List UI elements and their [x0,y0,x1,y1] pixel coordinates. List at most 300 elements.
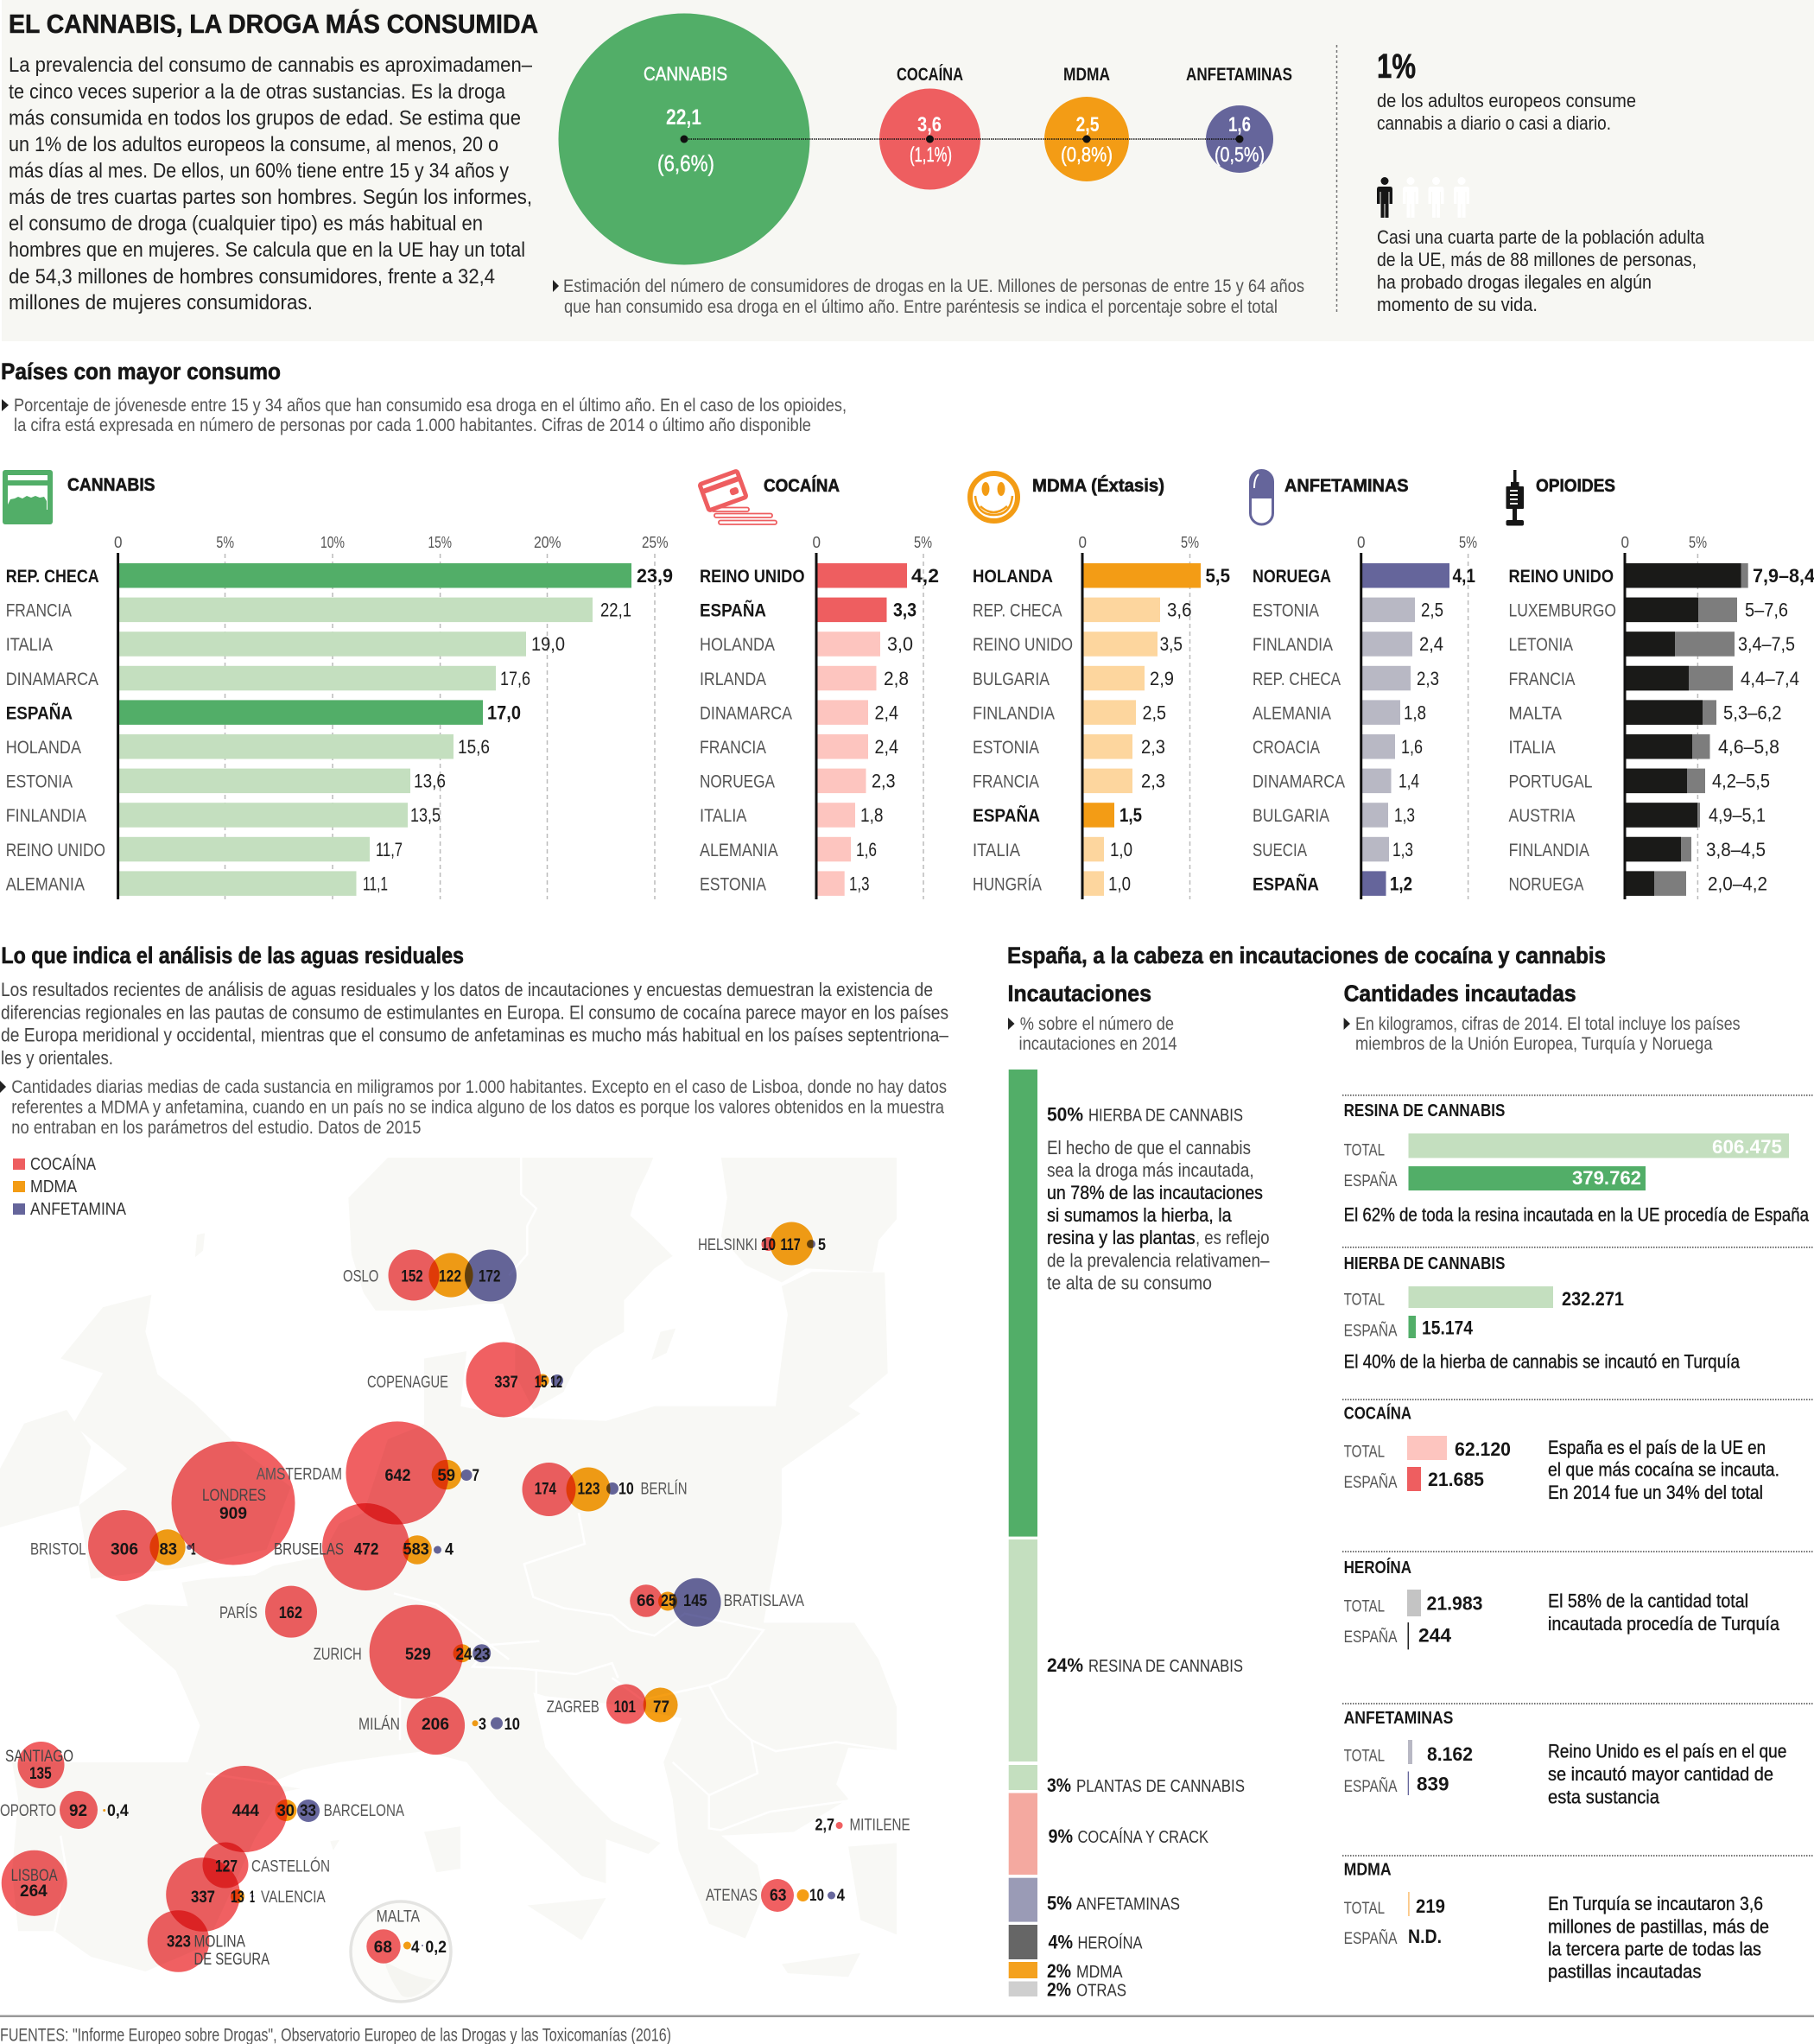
city: Amsterdam: 642 [385,1467,411,1485]
row: ESPAÑA [1253,871,1412,896]
row: LUXEMBURGO: LUXEMBURGO [1508,601,1616,621]
row: DINAMARCA: 1,4 [1399,771,1419,792]
label: 2% otras: 2% [1047,1978,1071,2000]
row: ALEMANIA: 1,8 [1404,701,1426,723]
row: ALEMANIA [700,837,877,861]
row: ESTONIA [1253,598,1443,622]
city: París: 162 [279,1604,302,1622]
city: París: PARÍS [219,1604,257,1622]
label: 3% plantas: PLANTAS DE CANNABIS [1076,1777,1245,1796]
city: Bratislava: 25 [661,1592,676,1610]
block: anfetaminas: esta sustancia [1548,1786,1660,1807]
note: map [0,1077,947,1138]
row: REP. CHECA: 2,3 [1417,668,1439,689]
city: Milán: 206 [422,1716,449,1734]
text block: hierba: un 78% de las incautaciones [1047,1182,1263,1203]
block: anfetaminas: 8.162 [1427,1743,1473,1765]
row: ITALIA: ITALIA [6,635,53,655]
city: Molina de Segura [148,1910,270,1972]
city: Oporto: 0,4 [107,1802,129,1820]
row: FRANCIA: 22,1 [600,600,631,621]
city: Lisboa: LISBOA [11,1867,58,1885]
city: Milán: 10 [504,1716,520,1734]
city: Atenas: 63 [770,1887,786,1905]
note: miembros de la Unión Europea, Turquía y Noruega [1355,1034,1713,1054]
row: HOLANDA [973,563,1230,587]
label: 24% resina [1047,1654,1243,1676]
row: CROACIA: CROACIA [1253,738,1320,758]
city: Bristol: 83 [159,1540,177,1558]
block: anfetaminas: 839 [1417,1773,1449,1795]
row: MALTA: 5,3–6,2 [1723,701,1781,723]
label: 50% hierba: 50% [1047,1104,1083,1126]
row: DINAMARCA: DINAMARCA [1253,772,1345,792]
block: cocaína: ESPAÑA [1344,1473,1398,1492]
icon: pill [1251,470,1273,524]
city: Berlín: 174 [535,1481,556,1499]
label: 4% heroína [1049,1932,1143,1953]
city: Mitilene: 2,7 [815,1816,834,1834]
label: 9% cocaína [1049,1825,1209,1847]
block: mdma: ESPAÑA [1344,1929,1398,1948]
row: REP. CHECA [6,563,673,587]
row: REP. CHECA: REP. CHECA [1253,670,1341,689]
block: cocaína: 62.120 [1455,1438,1511,1460]
city: Castellón: 127 [215,1857,238,1876]
row: FRANCIA: 2,3 [1141,771,1165,792]
row: REP. CHECA [1253,666,1439,690]
chart: MDMA [970,473,1230,899]
stacked bar [1009,1070,1037,1996]
row: REINO UNIDO [700,563,939,587]
row: FINLANDIA [1253,632,1443,657]
city: Oslo: 172 [479,1268,501,1286]
row: ESPAÑA: 1,2 [1390,873,1412,894]
chart: drug users bubbles: ANFETAMINAS [1186,65,1292,85]
city: Milán [358,1697,520,1755]
city: Bristol: BRISTOL [30,1540,86,1558]
row: REINO UNIDO: REINO UNIDO [1508,567,1614,587]
note: En kilogramos, cifras de 2014. El total incluye los países [1355,1014,1741,1034]
chart: cocaína [698,470,939,899]
row: FRANCIA: FRANCIA [700,738,766,758]
label: 24% resina: 24% [1047,1654,1083,1676]
intro text block: La prevalencia del consumo de cannabis es aproximadamen– [9,54,533,77]
block: cocaína: COCAÍNA [1344,1403,1411,1424]
text block: hierba [1047,1137,1270,1294]
stat: quarter of population [1377,226,1705,315]
text block: hierba: resina y las plantas [1047,1227,1196,1248]
block: resina de cannabis: RESINA DE CANNABIS [1344,1101,1505,1120]
chart note [553,276,1304,317]
chart: anfetaminas [1251,470,1477,899]
legend: ANFETAMINA [30,1200,127,1219]
chart: opioides [1506,470,1814,899]
city: Londres: LONDRES [202,1487,266,1505]
city: Berlín: 123 [577,1481,599,1499]
row: ESTONIA: ESTONIA [6,772,73,792]
row: ALEMANIA: ALEMANIA [1253,703,1331,723]
city: Amsterdam: 7 [472,1467,479,1485]
block: cocaína: España es el país de la UE en [1548,1437,1766,1458]
label: 4% heroína: HEROÍNA [1078,1933,1143,1953]
block: cocaína: 21.685 [1428,1469,1484,1490]
row: FRANCIA: FRANCIA [6,601,72,621]
row: FRANCIA: 4,4–7,4 [1741,668,1799,689]
city: Zagreb: ZAGREB [547,1698,599,1717]
row: IRLANDA [700,666,909,690]
heading: países con mayor consumo: Países con mayor consumo [1,359,281,384]
chart: drug users bubbles: MDMA [1063,65,1110,85]
city: Mitilene [815,1816,910,1834]
chart: drug users bubbles: 22,1 [666,105,701,130]
city: Amsterdam: 59 [437,1467,455,1485]
city: Oporto: 92 [69,1802,87,1820]
row: REP. CHECA: 3,6 [1167,600,1192,621]
row: ESTONIA: 2,5 [1421,600,1443,621]
text block: hierba: , es reflejo [1196,1227,1270,1248]
chart: drug users bubbles: 3,6 [917,113,942,136]
note: países [2,396,847,435]
row: IRLANDA: 2,8 [884,668,909,689]
subheading: Cantidades incautadas [1344,981,1576,1006]
block: resina de cannabis: ESPAÑA [1344,1171,1398,1190]
chart: opioides: 0 [1621,534,1629,551]
row: ITALIA: 1,8 [860,804,883,826]
block: mdma: pastillas incautadas [1548,1961,1702,1983]
row: NORUEGA: NORUEGA [700,772,775,792]
row: BULGARIA: BULGARIA [1253,806,1329,826]
row: FINLANDIA: FINLANDIA [1508,841,1589,860]
intro text block: de 54,3 millones de hombres consumidores, frente a 32,4 [9,265,495,289]
legend [13,1154,127,1219]
label: 4% heroína: 4% [1049,1932,1073,1953]
city: Valencia: VALENCIA [261,1888,326,1907]
panel: top summary [2,0,1814,341]
chart: drug users bubbles: (0,8%) [1061,143,1113,167]
block: heroína [1344,1558,1780,1649]
icon: cannabis [3,470,53,524]
text block: hierba: si sumamos la hierba, la [1047,1204,1232,1226]
row: BULGARIA: BULGARIA [973,670,1050,689]
chart: opioides: 5% [1689,534,1707,551]
city: Zurich: 23 [474,1646,491,1664]
row: FINLANDIA [1508,837,1766,861]
city: Santiago: SANTIAGO [5,1748,73,1766]
city: Atenas: 10 [809,1887,824,1905]
row: HOLANDA: HOLANDA [6,738,81,758]
icon: syringe [1506,470,1524,525]
row: ALEMANIA: 11,1 [363,873,388,894]
row: PORTUGAL: PORTUGAL [1508,772,1593,792]
chart note: Estimación del número de consumidores de drogas en la UE. Millones de personas de entre 15 y 64 años [563,276,1304,296]
row: ESPAÑA [700,598,917,622]
row: DINAMARCA [6,666,530,690]
text block: hierba: de la prevalencia relativamen– [1047,1249,1270,1272]
row: ESPAÑA [973,803,1142,828]
row: FRANCIA [700,734,898,759]
label: 50% hierba: HIERBA DE CANNABIS [1088,1107,1243,1126]
row: REP. CHECA [973,598,1192,622]
city: Barcelona: 30 [277,1802,295,1820]
chart: drug users bubbles: 1,6 [1228,113,1251,136]
block: mdma: MDMA [1344,1861,1392,1880]
row: ALEMANIA [1253,700,1426,725]
row: SUECIA [1253,837,1413,861]
block: mdma: N.D. [1408,1926,1442,1947]
block: hierba de cannabis: ESPAÑA [1344,1322,1398,1341]
city: Molina de Segura: MOLINA [193,1933,245,1951]
chart: cannabis: 15% [428,534,452,551]
row: DINAMARCA: DINAMARCA [6,670,98,689]
row: ESTONIA: 1,3 [849,873,869,894]
chart: MDMA: 5% [1181,534,1199,551]
row: LETONIA: LETONIA [1508,635,1573,655]
city: Oslo: OSLO [343,1268,378,1286]
city: Zagreb: 101 [614,1698,636,1717]
city: Bratislava: 66 [637,1592,655,1610]
intro text block: el consumo de droga (cualquier tipo) es más habitual en [9,213,483,235]
city: Malta: 68 [374,1939,392,1957]
block: cocaína: el que más cocaína se incauta. [1548,1458,1779,1481]
city: Barcelona [201,1766,404,1852]
row: REINO UNIDO: 11,7 [376,839,403,860]
text block: aguas residuales: Los resultados recientes de análisis de aguas residuales y los datos de incautaciones y encuestas demuestran la existencia de [1,979,933,1000]
text block: aguas residuales: de Europa meridional y occidental, mientras que el consumo de anfetaminas es mucho más habitual en los países septentriona– [1,1025,949,1046]
city: Bratislava: 145 [683,1592,707,1610]
city: Molina de Segura: DE SEGURA [193,1951,270,1969]
row: REINO UNIDO: REINO UNIDO [973,635,1073,655]
row: ALEMANIA: 1,6 [856,839,877,860]
city: Bruselas: 583 [403,1540,429,1558]
row: NORUEGA: NORUEGA [1508,874,1584,894]
city: Bristol [30,1510,196,1581]
row: REINO UNIDO: REINO UNIDO [6,841,105,860]
chart: MDMA: 0 [1078,534,1087,551]
row: NORUEGA [1508,871,1767,896]
intro text block: más de tres cuartas partes son hombres. Según los informes, [9,186,532,209]
row: ITALIA: ITALIA [700,806,746,826]
city: Mitilene: MITILENE [850,1816,910,1834]
row: HUNGRÍA [973,871,1131,896]
row: FINLANDIA [973,700,1166,725]
icon: people one in four [1377,177,1469,218]
city: Valencia: 13 [231,1888,244,1907]
row: LUXEMBURGO: 5–7,6 [1745,600,1788,621]
intro text block: te cinco veces superior a la de otras sustancias. Es la droga [9,80,506,104]
city: Malta: 0,2 [425,1939,447,1957]
row: REP. CHECA: 23,9 [637,565,673,587]
chart: cannabis: 5% [216,534,234,551]
row: LETONIA [1508,632,1795,657]
row: ESPAÑA [6,700,521,725]
chart: cannabis: 10% [320,534,345,551]
intro text block: más días al mes. De ellos, un 60% tiene entre 15 y 34 años y [9,159,509,183]
row: ESTONIA: 13,6 [414,771,446,792]
row: ITALIA: 4,6–5,8 [1718,736,1779,758]
block: hierba de cannabis: HIERBA DE CANNABIS [1344,1254,1505,1273]
chart: cannabis: 0 [114,534,123,551]
label: 5% anfetaminas: ANFETAMINAS [1076,1895,1180,1914]
note: map: referentes a MDMA y anfetamina, cuando en un país no se indica alguno de los datos es porque los valores obtenidos en la muestra [11,1098,944,1118]
block: cocaína: TOTAL [1344,1443,1385,1462]
row: HOLANDA [6,734,490,759]
stat: quarter of population: de la UE, más de 88 millones de personas, [1377,249,1697,270]
block: anfetaminas: TOTAL [1344,1748,1385,1766]
note: países: Porcentaje de jóvenesde entre 15 y 34 años que han consumido esa droga en el último año. En el caso de los opioides, [14,396,847,416]
row: HUNGRÍA: HUNGRÍA [973,874,1042,894]
city: Copenhague: 337 [494,1374,518,1392]
row: ESTONIA [6,769,446,793]
row: ITALIA: ITALIA [973,841,1020,860]
city: Zurich: 529 [405,1646,431,1664]
map: Europe background [0,1158,897,1983]
block: heroína: 21.983 [1427,1593,1482,1614]
block: hierba de cannabis: 232.271 [1562,1288,1624,1310]
note: incautaciones en 2014 [1019,1034,1177,1054]
block: mdma: En Turquía se incautaron 3,6 [1548,1893,1763,1914]
block: resina de cannabis [1344,1101,1810,1225]
block: mdma: TOTAL [1344,1900,1385,1918]
row: IRLANDA: IRLANDA [700,670,766,689]
text block: aguas residuales [1,979,949,1069]
city: Berlín: 10 [618,1481,634,1499]
row: ITALIA: 1,0 [1110,839,1132,860]
city: Helsinki: 10 [761,1236,776,1254]
block: mdma: 219 [1416,1895,1445,1917]
city: Oporto [0,1791,129,1829]
block: anfetaminas [1344,1709,1786,1807]
text block: hierba: te alta de su consumo [1047,1273,1212,1294]
row: REINO UNIDO: 4,2 [911,565,939,587]
city: Molina de Segura: 323 [167,1933,191,1951]
row: NORUEGA [700,769,896,793]
block: heroína: ESPAÑA [1344,1628,1398,1647]
chart: drug users bubbles: 2,5 [1076,113,1099,136]
row: NORUEGA [1253,563,1475,587]
chart title: OPIOIDES [1536,476,1615,496]
city: Barcelona: 444 [232,1802,259,1820]
row: FRANCIA [973,769,1165,793]
city: Helsinki [698,1222,826,1265]
block: heroína: incautada procedía de Turquía [1548,1613,1780,1635]
label: 2% mdma [1047,1960,1123,1982]
row: ESPAÑA: ESPAÑA [700,601,766,621]
city: Malta: 4 [411,1939,420,1957]
city: Amsterdam: AMSTERDAM [257,1466,342,1484]
panel: cantidades incautadas [1342,981,1814,1983]
label: 3% plantas: 3% [1047,1774,1071,1796]
text block: hierba: sea la droga más incautada, [1047,1159,1254,1181]
text block: aguas residuales: diferencias regionales en las pautas de consumo de estimulantes en Europa. El consumo de cocaína parece mayor en los países [1,1002,948,1024]
row: DINAMARCA: 17,6 [500,668,530,689]
row: ITALIA: ITALIA [1508,738,1556,758]
city: Valencia: 337 [191,1888,215,1907]
stat: 1% daily users: cannabis a diario o casi a diario. [1377,112,1611,134]
city: Santiago [5,1742,73,1788]
label: 5% anfetaminas [1047,1893,1180,1914]
city: Lisboa [2,1850,67,1916]
row: NORUEGA: NORUEGA [1253,567,1331,587]
chart: drug users bubbles: (1,1%) [910,143,952,167]
chart: drug users bubbles: CANNABIS [644,63,727,85]
row: HOLANDA: HOLANDA [973,567,1053,587]
city: Bruselas: BRUSELAS [274,1540,344,1558]
row: NORUEGA: 2,0–4,2 [1708,873,1767,894]
title: EL CANNABIS, LA DROGA MÁS CONSUMIDA [9,9,538,39]
note: map: Cantidades diarias medias de cada sustancia en miligramos por 1.000 habitantes. Excepto en el caso de Lisboa, donde no hay datos [11,1077,947,1097]
block: anfetaminas: ANFETAMINAS [1344,1709,1453,1728]
city: Amsterdam [257,1421,479,1525]
row: REINO UNIDO [1508,563,1814,587]
row: ESTONIA: ESTONIA [700,874,766,894]
city: París [219,1586,317,1638]
city: Zurich: ZURICH [314,1646,362,1664]
city: Castellón [202,1842,330,1888]
row: ALEMANIA: ALEMANIA [700,841,778,860]
city: Santiago: 135 [29,1765,52,1783]
row: NORUEGA: 2,3 [872,771,896,792]
label: 2% otras [1047,1978,1126,2000]
city: Valencia [166,1857,326,1932]
city: Helsinki: 5 [818,1236,826,1254]
city: Atenas: ATENAS [706,1887,758,1905]
row: FINLANDIA: 2,4 [1419,633,1443,655]
row: CROACIA [1253,734,1423,759]
row: LETONIA: 3,4–7,5 [1738,633,1795,655]
city: Copenhague [367,1343,563,1417]
chart: anfetaminas: 5% [1459,534,1477,551]
city: Bristol: 1 [191,1540,196,1558]
chart: cannabis: 20% [534,534,561,551]
block: resina de cannabis: 606.475 [1712,1136,1782,1158]
city: Milán: 3 [479,1716,486,1734]
city: Copenhague: COPENAGUE [367,1374,448,1392]
row: AUSTRIA: AUSTRIA [1508,806,1576,826]
city: Zurich: 24 [456,1646,473,1664]
city: Valencia: 1 [250,1888,255,1907]
city: Barcelona: 33 [300,1802,316,1820]
row: HUNGRÍA: 1,0 [1108,873,1131,894]
city: Milán: MILÁN [358,1716,400,1734]
row: ESTONIA: 2,3 [1141,736,1165,758]
row: NORUEGA: 4,1 [1453,565,1475,587]
row: REINO UNIDO [6,837,403,861]
city: Malta: MALTA [377,1908,420,1927]
label: 2% mdma: MDMA [1076,1963,1123,1982]
row: SUECIA: 1,3 [1392,839,1413,860]
city: Bratislava: BRATISLAVA [724,1592,804,1610]
row: HOLANDA: 3,0 [887,633,913,655]
city: Zurich [314,1605,491,1698]
heading: aguas residuales: Lo que indica el análisis de las aguas residuales [1,943,464,968]
chart: cannabis [3,470,673,899]
note [1344,1014,1741,1054]
label: 9% cocaína: 9% [1049,1825,1073,1847]
block: resina de cannabis: TOTAL [1344,1142,1385,1159]
block: resina de cannabis: 379.762 [1572,1167,1641,1189]
row: CROACIA: 1,6 [1401,736,1423,758]
row: REINO UNIDO: REINO UNIDO [700,567,805,587]
note [1008,1014,1177,1054]
block: heroína: El 58% de la cantidad total [1548,1590,1748,1612]
row: HOLANDA [700,632,913,657]
row: ESTONIA [973,734,1165,759]
block: hierba de cannabis [1344,1254,1741,1373]
subheading: Incautaciones [1007,981,1151,1006]
chart: drug users bubbles: (0,5%) [1215,143,1265,167]
block: mdma [1344,1861,1769,1983]
